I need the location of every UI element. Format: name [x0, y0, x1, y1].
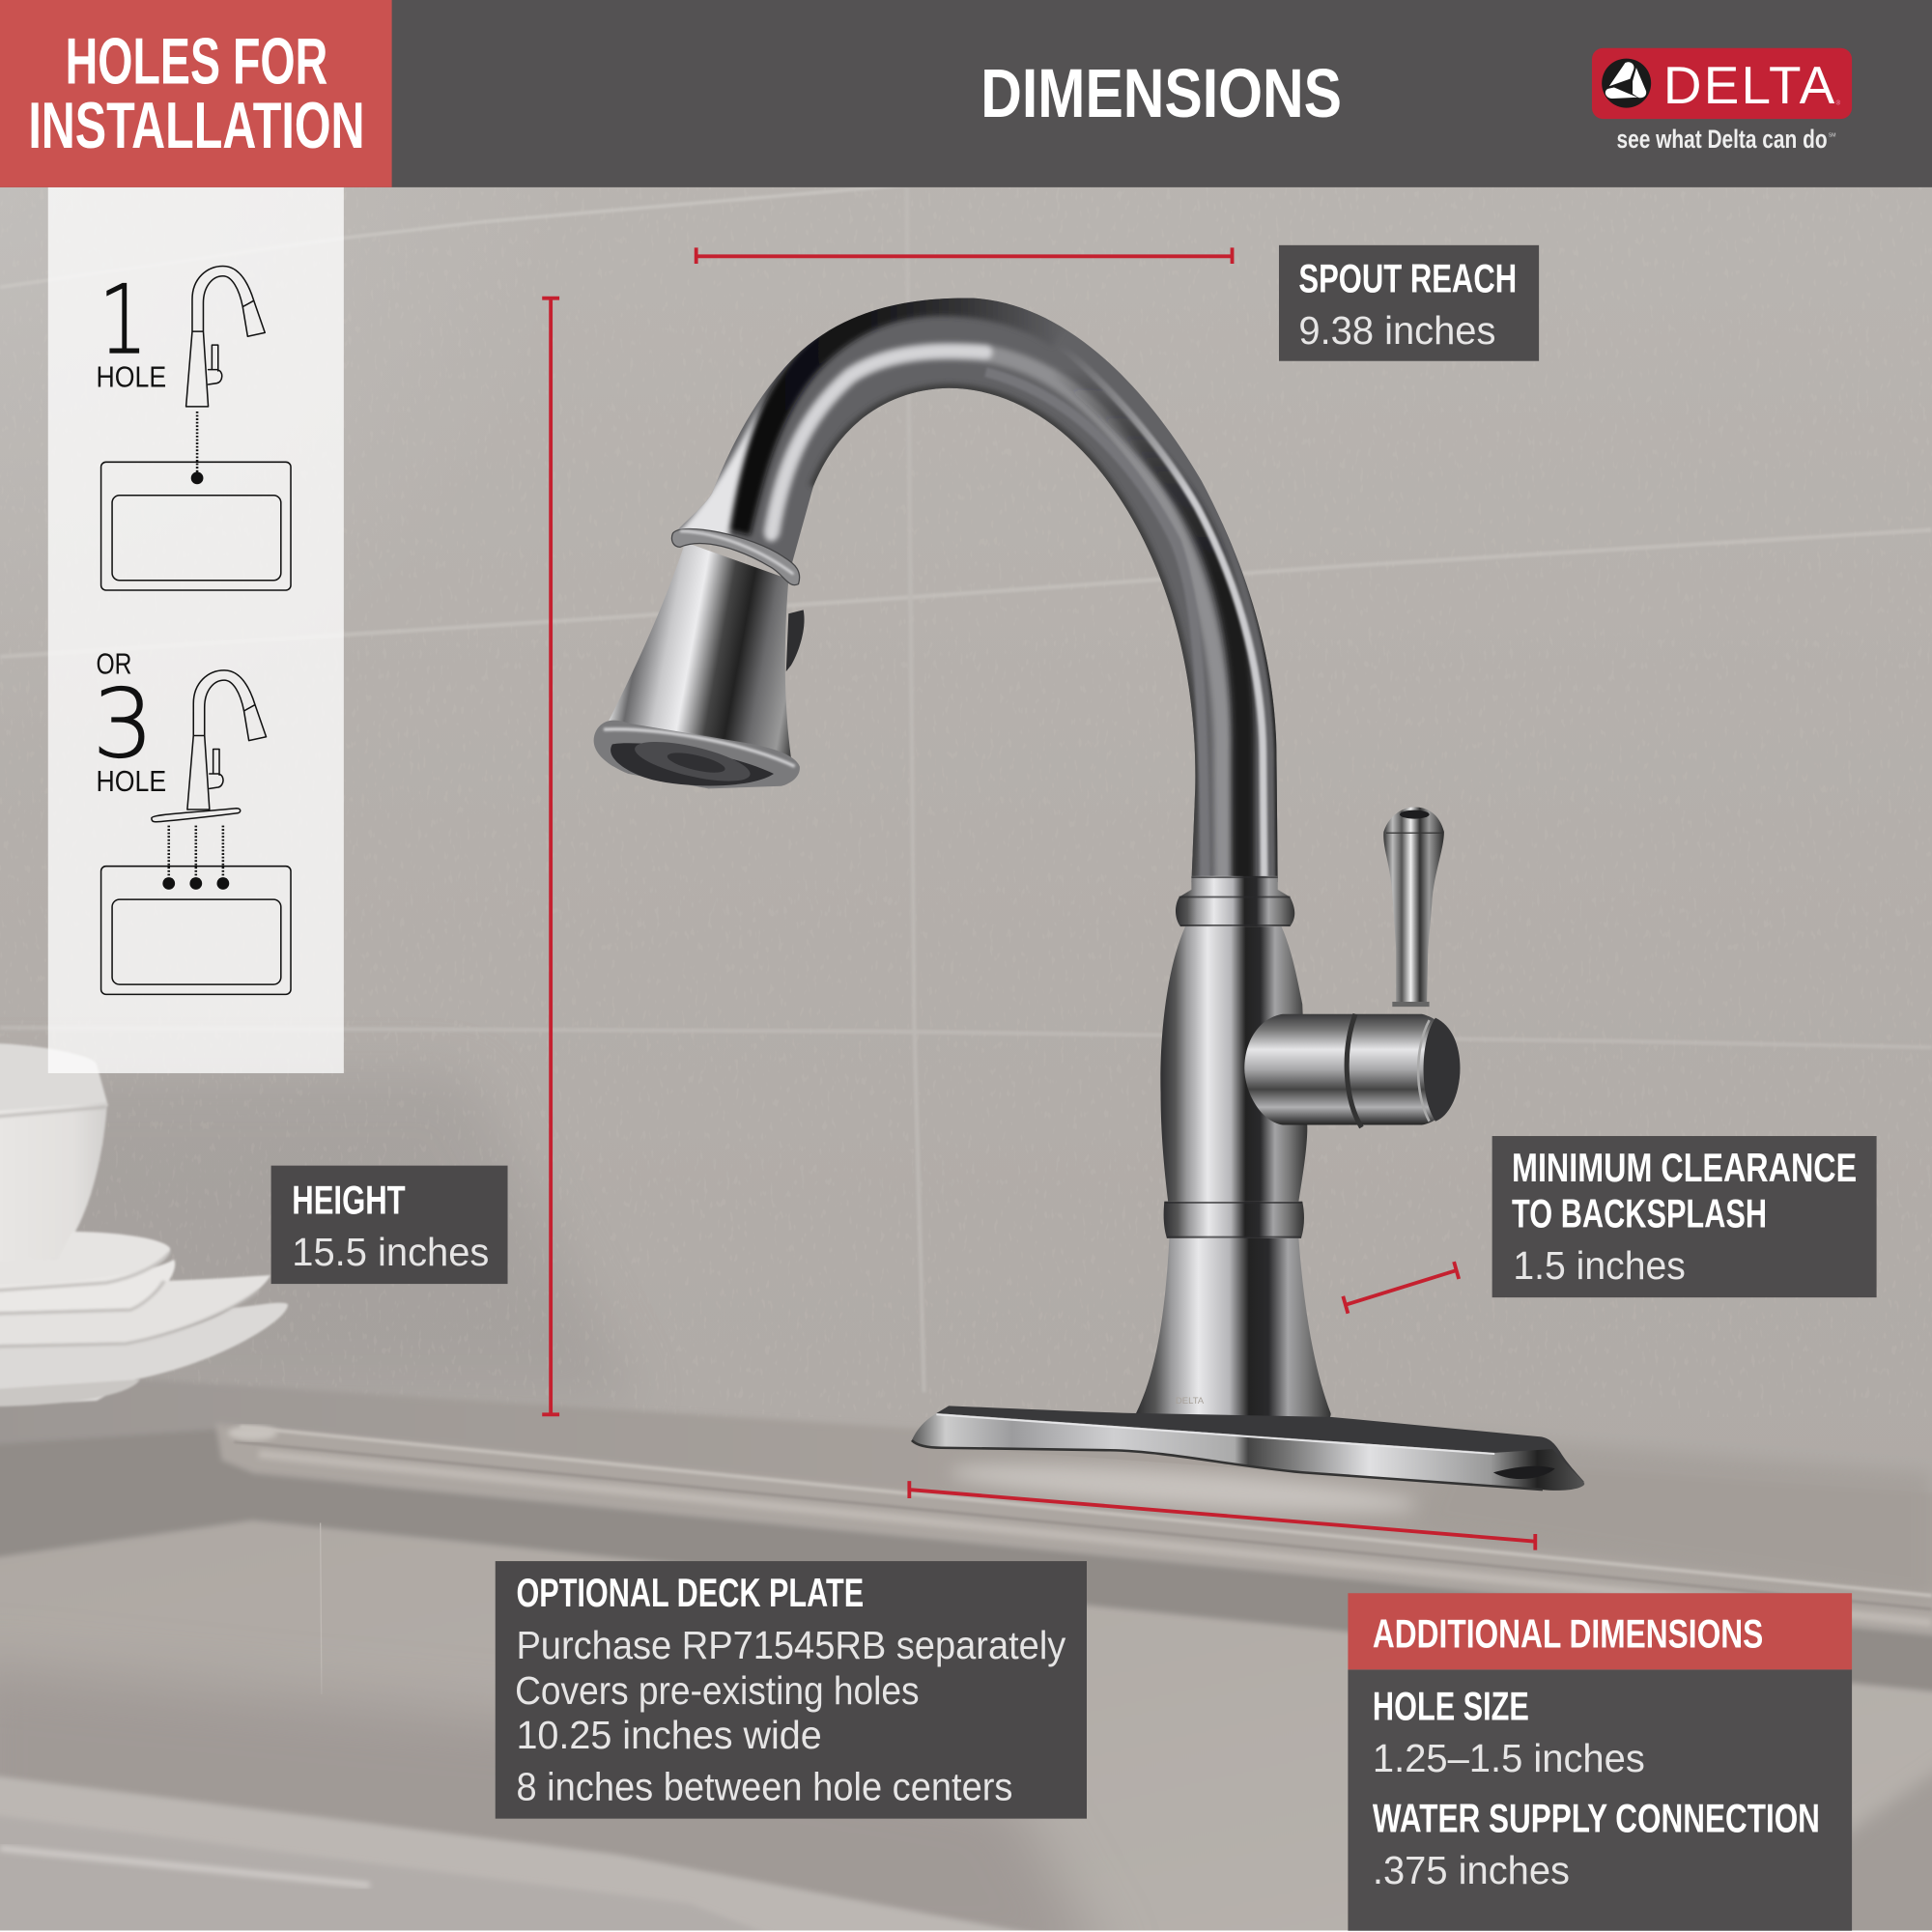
option: 1 hole: HOLE	[96, 361, 166, 394]
Delta logo: ®	[1836, 99, 1841, 106]
callout: height: HEIGHT	[292, 1177, 406, 1222]
callout: spout reach: 9.38 inches	[1298, 308, 1495, 353]
panel: additional dimensions	[1348, 1593, 1852, 1931]
option: 1 hole	[96, 266, 291, 590]
heading tab: holes for installation	[0, 0, 392, 187]
header bar	[0, 0, 1932, 187]
deck plate	[912, 1406, 1584, 1491]
heading tab: holes for installation: INSTALLATION	[28, 90, 365, 162]
callout: optional deck plate: 10.25 inches wide	[516, 1713, 822, 1757]
panel: additional dimensions: 1.25–1.5 inches	[1373, 1736, 1645, 1780]
handle body	[1244, 1014, 1460, 1127]
option: 3 hole: HOLE	[96, 765, 166, 798]
callout: spout reach	[1279, 245, 1539, 361]
callout: minimum clearance	[1492, 1136, 1877, 1297]
panel: additional dimensions: HOLE SIZE	[1373, 1684, 1529, 1729]
callout: optional deck plate: Purchase RP71545RB separately	[516, 1623, 1066, 1667]
faucet base body: DELTA	[1176, 1396, 1205, 1406]
stacked white dishes	[0, 1043, 288, 1406]
callout: optional deck plate	[496, 1561, 1087, 1819]
dimension line: spout reach	[696, 247, 1233, 264]
Delta logo: SM	[1829, 133, 1835, 139]
faucet base body	[1136, 876, 1331, 1435]
callout: optional deck plate: Covers pre-existing holes	[515, 1668, 920, 1713]
dimension line: deck plate width	[909, 1481, 1535, 1550]
option: 3 hole	[93, 648, 291, 994]
Delta logo: DELTA	[1663, 55, 1835, 115]
panel: additional dimensions: ADDITIONAL DIMENSIONS	[1373, 1610, 1763, 1656]
faucet photo	[594, 298, 1584, 1522]
title: DIMENSIONS	[980, 55, 1342, 132]
dimension line: height	[542, 298, 559, 1414]
callout: spout reach: SPOUT REACH	[1298, 255, 1517, 300]
callout: height: 15.5 inches	[292, 1230, 489, 1274]
panel: additional dimensions: .375 inches	[1373, 1848, 1570, 1892]
callout: height	[271, 1166, 508, 1284]
option: 3 hole: 3	[93, 669, 154, 780]
faucet reflection on counter	[948, 1455, 1417, 1522]
pull-down spray head	[594, 528, 805, 789]
callout: optional deck plate: 8 inches between hole centers	[516, 1765, 1012, 1809]
callout: minimum clearance: 1.5 inches	[1513, 1243, 1686, 1288]
handle lever	[1383, 807, 1444, 1005]
callout: optional deck plate: OPTIONAL DECK PLATE	[516, 1570, 864, 1615]
spout arc	[675, 298, 1278, 887]
Delta logo	[1592, 48, 1852, 154]
callout: minimum clearance: TO BACKSPLASH	[1512, 1190, 1767, 1236]
option: 3 hole: OR	[96, 648, 131, 681]
panel: holes for installation	[48, 187, 344, 1073]
dimension line: backsplash clearance	[1343, 1262, 1459, 1314]
Delta logo: see what Delta can do	[1616, 125, 1828, 154]
heading tab: holes for installation: HOLES FOR	[66, 26, 327, 99]
option: 1 hole: 1	[99, 266, 148, 376]
